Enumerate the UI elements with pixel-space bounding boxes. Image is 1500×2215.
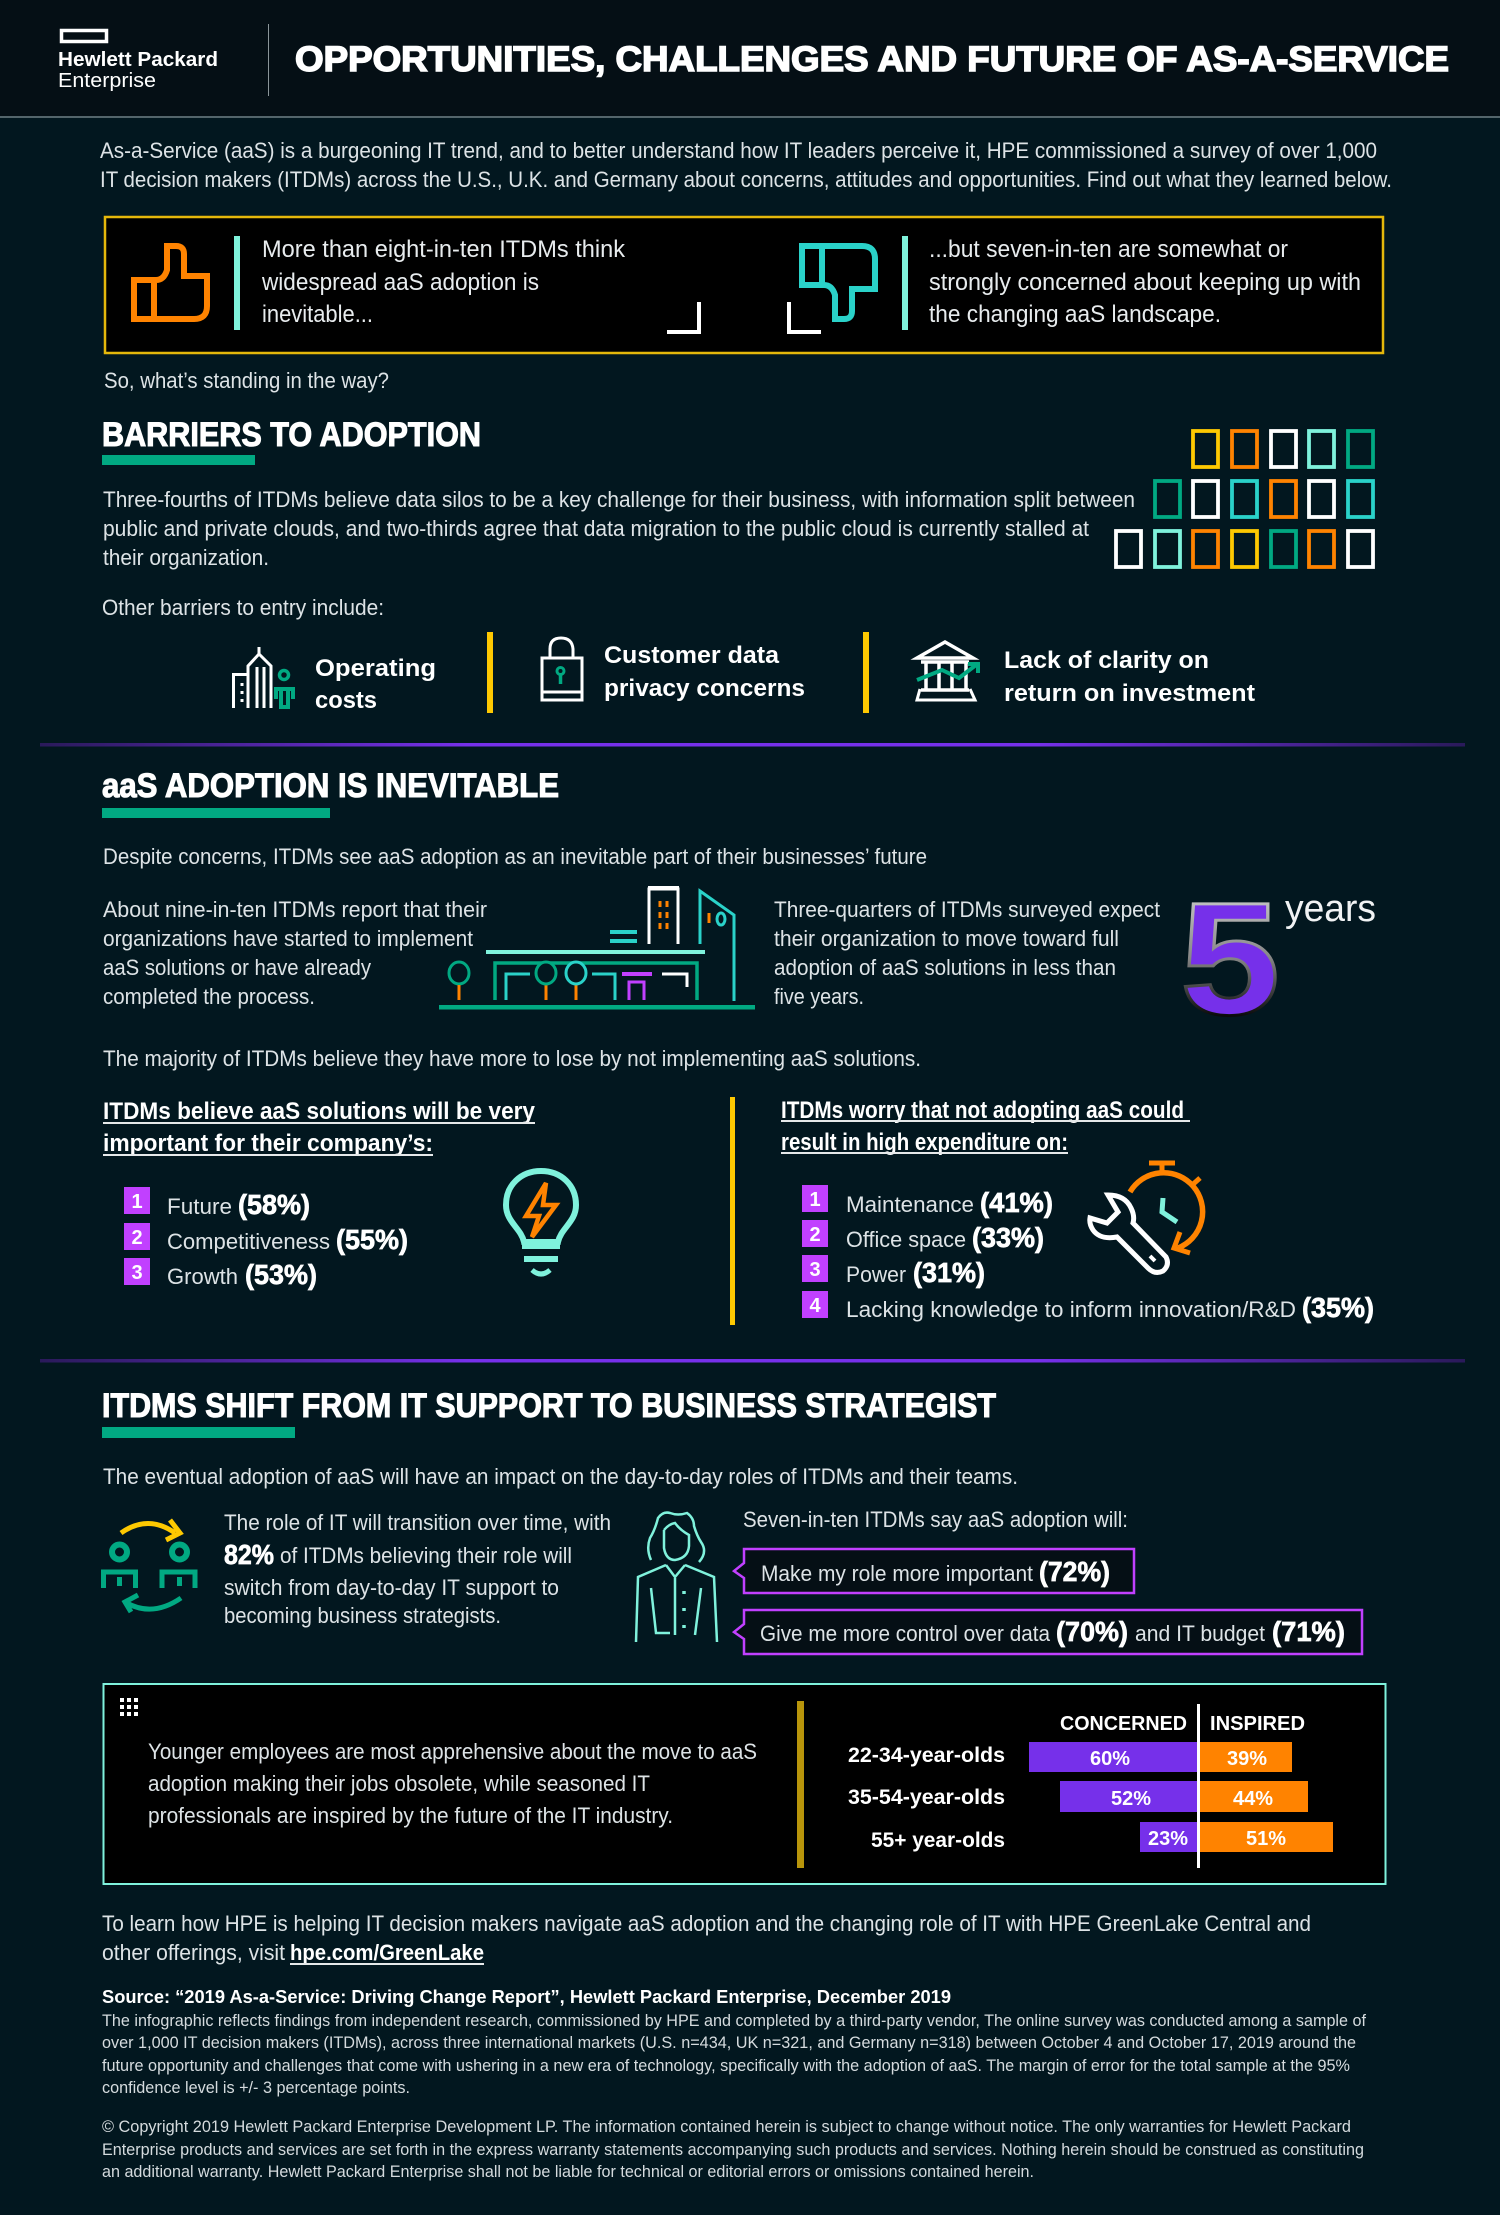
title: OPPORTUNITIES, CHALLENGES AND FUTURE OF AS-A-SERVICE <box>295 40 1449 79</box>
chart: concerned vs inspired by age: 44% <box>1233 1788 1273 1810</box>
logo: Hewlett Packard Enterprise: Hewlett Packard <box>58 49 218 71</box>
illustration: city skyline <box>439 888 755 1010</box>
text: eight in ten: widespread aaS adoption is <box>261 269 539 296</box>
list: expenditure ranks: Office space <box>846 1227 966 1252</box>
icon: bank with rising arrow <box>917 642 978 700</box>
heading: expenditure <box>781 1097 1190 1156</box>
chart: concerned vs inspired by age: 60% <box>1090 1748 1130 1770</box>
intro paragraph: As-a-Service (aaS) is a burgeoning IT trend, and to better understand how IT leaders perceive it, HPE commissioned a survey of over 1,000 <box>100 138 1377 163</box>
text: role transition: 82% <box>224 1539 274 1570</box>
text: call to action: hpe.com/GreenLake <box>290 1940 484 1965</box>
text: source note <box>102 1987 1366 2097</box>
label: customer data privacy: privacy concerns <box>604 675 805 702</box>
text: copyright: © Copyright 2019 Hewlett Packard Enterprise Development LP. The information contained herein is subject to change without notice. The only warranties for Hewlett Packard <box>102 2117 1351 2136</box>
icon: colored data squares <box>1116 431 1373 567</box>
list: importance ranks: 2 <box>131 1227 143 1249</box>
heading: ITDMs shift: ITDMS SHIFT FROM IT SUPPORT TO BUSINESS STRATEGIST <box>102 1387 996 1425</box>
chart: concerned vs inspired by age: 51% <box>1246 1828 1286 1850</box>
text: copyright: Enterprise products and services are set forth in the express warranty statements accompanying such products and services. Nothing herein should be construed as constituting <box>102 2140 1364 2159</box>
callout: more control: (71%) <box>1272 1616 1345 1647</box>
callout: more control <box>734 1610 1362 1654</box>
text: call to action <box>102 1911 1311 1965</box>
text: barriers paragraph: public and private clouds, and two-thirds agree that data migration to the public cloud is currently stalled at <box>103 516 1089 541</box>
callout: role more important: (72%) <box>1039 1556 1110 1587</box>
text: standing in the way: So, what’s standing in the way? <box>104 368 389 393</box>
heading: expenditure: ITDMs worry that not adopting aaS could <box>781 1097 1184 1124</box>
heading: ITDMs shift <box>102 1387 996 1438</box>
text: seven in ten <box>929 236 1361 328</box>
text: seven in ten: the changing aaS landscape. <box>929 301 1221 328</box>
text: seven in ten: ...but seven-in-ten are somewhat or <box>929 236 1288 263</box>
chart: concerned vs inspired by age: CONCERNED <box>1060 1713 1187 1735</box>
logo: Hewlett Packard Enterprise: Enterprise <box>58 70 156 92</box>
panel: very important for company <box>103 1098 576 1290</box>
text: three quarters: five years. <box>774 984 864 1009</box>
text: source note: confidence level is +/- 3 percentage points. <box>102 2078 410 2097</box>
list: expenditure ranks: 1 <box>809 1189 821 1211</box>
stat: 5 years: 5 <box>1180 869 1280 1048</box>
chart: concerned vs inspired by age: 52% <box>1111 1788 1151 1810</box>
list: expenditure ranks: (35%) <box>1302 1292 1374 1323</box>
icon: two people exchanging roles <box>104 1520 195 1612</box>
text: younger employees: adoption making their jobs obsolete, while seasoned IT <box>148 1771 650 1796</box>
logo: Hewlett Packard Enterprise <box>58 30 218 92</box>
text: eight in ten: More than eight-in-ten ITDMs think <box>262 236 626 263</box>
label: operating costs <box>315 655 436 714</box>
icon: thumbs up <box>134 246 207 319</box>
text: role transition <box>224 1510 611 1628</box>
heading: importance: ITDMs believe aaS solutions will be very <box>103 1098 536 1125</box>
list: expenditure ranks: Lacking knowledge to inform innovation/R&D <box>846 1297 1296 1322</box>
intro paragraph <box>100 138 1392 192</box>
stat: 5 years: years <box>1285 888 1376 930</box>
panel: age comparison <box>104 1684 1386 1884</box>
text: barriers paragraph: their organization. <box>103 545 269 570</box>
text: nine in ten: aaS solutions or have already <box>103 955 371 980</box>
label: ROI clarity: Lack of clarity on <box>1004 647 1209 674</box>
label: operating costs: Operating <box>315 655 436 682</box>
text: despite concerns: Despite concerns, ITDMs see aaS adoption as an inevitable part of their businesses’ future <box>103 844 927 869</box>
text: role transition: switch from day-to-day IT support to <box>224 1575 559 1600</box>
label: ROI clarity <box>1004 647 1255 707</box>
panel: high expenditure <box>781 1097 1374 1323</box>
label: customer data privacy <box>604 642 805 702</box>
chart: concerned vs inspired by age <box>848 1704 1333 1868</box>
callout: more control: (70%) <box>1056 1616 1128 1647</box>
white corner marks <box>667 302 821 332</box>
heading: expenditure: result in high expenditure on: <box>781 1129 1068 1156</box>
label: customer data privacy: Customer data <box>604 642 780 669</box>
heading: aaS adoption is inevitable: aaS ADOPTION IS INEVITABLE <box>102 767 559 805</box>
chart: concerned vs inspired by age: 55+ year-olds <box>871 1829 1005 1852</box>
panel: sentiment callout <box>105 217 1383 353</box>
heading: importance <box>103 1098 536 1157</box>
list: expenditure ranks: (33%) <box>972 1222 1044 1253</box>
list: importance ranks: (53%) <box>245 1259 317 1290</box>
text: three quarters <box>774 897 1160 1009</box>
icon: light bulb <box>506 1171 576 1274</box>
text: three quarters: Three-quarters of ITDMs surveyed expect <box>774 897 1160 922</box>
list: expenditure ranks: 4 <box>809 1295 821 1317</box>
icon: woman in suit <box>636 1513 717 1642</box>
list: expenditure ranks: 2 <box>809 1224 821 1246</box>
heading: aaS adoption is inevitable <box>102 767 559 818</box>
list: importance ranks: 3 <box>131 1262 143 1284</box>
list: importance ranks <box>124 1187 408 1290</box>
text: younger employees <box>148 1739 757 1828</box>
list: expenditure ranks: Maintenance <box>846 1192 974 1217</box>
text: eight in ten <box>261 236 626 328</box>
header band <box>0 0 1500 118</box>
text: source note: future opportunity and challenges that come with ushering in a new era of technology, specifically with the adoption of aaS. The margin of error for the total sample at the 95% <box>102 2056 1350 2075</box>
text: copyright <box>102 2117 1364 2181</box>
text: copyright: an additional warranty. Hewlett Packard Enterprise shall not be liable for technical or editorial errors or omissions contained herein. <box>102 2162 1034 2181</box>
list: importance ranks: 1 <box>131 1191 143 1213</box>
text: source note: over 1,000 IT decision makers (ITDMs), across three international markets (U.S. n=434, UK n=321, and Germany n=318) between October 4 and October 17, 2019 around the <box>102 2033 1356 2052</box>
chart: concerned vs inspired by age: INSPIRED <box>1210 1713 1305 1735</box>
text: more to lose: The majority of ITDMs believe they have more to lose by not implementing aaS solutions. <box>103 1046 921 1071</box>
text: nine in ten <box>103 897 487 1009</box>
chart: concerned vs inspired by age: 23% <box>1148 1828 1188 1850</box>
list: importance ranks: (55%) <box>336 1224 408 1255</box>
text: eight in ten: inevitable... <box>262 301 373 328</box>
icon: thumbs down <box>802 246 875 319</box>
text: other barriers: Other barriers to entry include: <box>102 595 384 620</box>
text: younger employees: Younger employees are most apprehensive about the move to aaS <box>148 1739 757 1764</box>
list: expenditure ranks: Power <box>846 1262 906 1287</box>
text: source note: Source: “2019 As-a-Service: Driving Change Report”, Hewlett Packard Enterprise, December 2019 <box>102 1987 951 2007</box>
list: importance ranks: Future <box>167 1194 232 1219</box>
list: importance ranks: (58%) <box>238 1189 310 1220</box>
text: call to action: To learn how HPE is helping IT decision makers navigate aaS adoption and the changing role of IT with HPE GreenLake Central and <box>102 1911 1311 1936</box>
callout: role more important: Make my role more important <box>761 1561 1033 1586</box>
text: younger employees: professionals are inspired by the future of the IT industry. <box>148 1803 673 1828</box>
callout: role more important <box>734 1549 1134 1593</box>
text: role transition: becoming business strategists. <box>224 1603 501 1628</box>
text: seven in ten say: Seven-in-ten ITDMs say aaS adoption will: <box>743 1507 1128 1532</box>
barriers list <box>234 632 1255 714</box>
icon: padlock <box>542 638 582 700</box>
list: expenditure ranks: 3 <box>809 1259 821 1281</box>
chart: concerned vs inspired by age: 35-54-year-olds <box>848 1786 1005 1809</box>
label: operating costs: costs <box>315 687 377 714</box>
text: role transition: The role of IT will transition over time, with <box>224 1510 611 1535</box>
list: expenditure ranks: (41%) <box>980 1187 1053 1218</box>
text: role transition: of ITDMs believing their role will <box>280 1543 572 1568</box>
stat: 5 years <box>1180 869 1376 1048</box>
chart: concerned vs inspired by age: 22-34-year-olds <box>848 1744 1005 1767</box>
list: importance ranks: Competitiveness <box>167 1229 330 1254</box>
text: barriers paragraph <box>103 487 1135 570</box>
heading: barriers to adoption: BARRIERS TO ADOPTION <box>102 416 481 454</box>
list: expenditure ranks <box>802 1185 1374 1323</box>
list: importance ranks: Growth <box>167 1264 238 1289</box>
text: nine in ten: organizations have started to implement <box>103 926 473 951</box>
icon: wrench and stopwatch <box>1090 1163 1203 1272</box>
label: ROI clarity: return on investment <box>1004 680 1255 707</box>
text: seven in ten: strongly concerned about keeping up with <box>929 269 1361 296</box>
text: three quarters: adoption of aaS solutions in less than <box>774 955 1116 980</box>
list: expenditure ranks: (31%) <box>913 1257 985 1288</box>
text: nine in ten: About nine-in-ten ITDMs report that their <box>103 897 487 922</box>
text: call to action: other offerings, visit <box>102 1940 285 1965</box>
icon: building with person <box>234 647 293 708</box>
callout: more control: and IT budget <box>1135 1621 1265 1646</box>
callout: more control: Give me more control over data <box>760 1621 1051 1646</box>
text: source note: The infographic reflects findings from independent research, commissioned by HPE and completed by a third-party vendor, The online survey was conducted among a sample of <box>102 2011 1366 2030</box>
intro paragraph: IT decision makers (ITDMs) across the U.S., U.K. and Germany about concerns, attitudes and opportunities. Find out what they learned below. <box>100 167 1392 192</box>
text: eventual adoption: The eventual adoption of aaS will have an impact on the day-to-day roles of ITDMs and their teams. <box>103 1464 1018 1489</box>
icon: grid of dots <box>120 1698 138 1716</box>
text: three quarters: their organization to move toward full <box>774 926 1119 951</box>
text: barriers paragraph: Three-fourths of ITDMs believe data silos to be a key challenge for their business, with information split between <box>103 487 1135 512</box>
chart: concerned vs inspired by age: 39% <box>1227 1748 1267 1770</box>
heading: importance: important for their company’s: <box>103 1130 433 1157</box>
text: nine in ten: completed the process. <box>103 984 315 1009</box>
